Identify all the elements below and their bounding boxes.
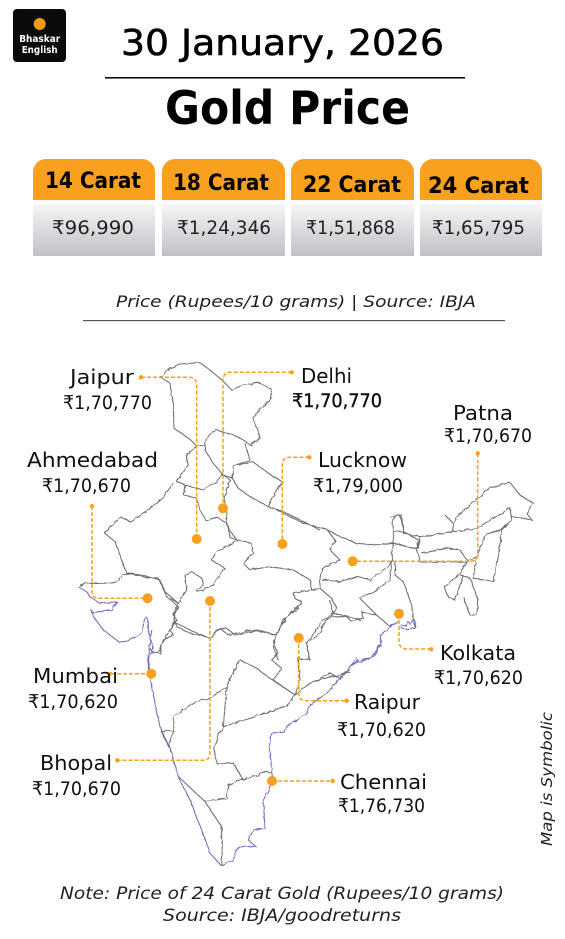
footnote bbox=[60, 884, 504, 926]
card: 14 Carat bbox=[33, 159, 155, 256]
callout: Raipur: ₹1,70,620 bbox=[337, 719, 426, 741]
callout: Ahmedabad: ₹1,70,670 bbox=[42, 475, 131, 497]
footnote: Note: Price of 24 Carat Gold (Rupees/10 grams) bbox=[60, 884, 504, 904]
logo: Bhaskar English bbox=[13, 9, 66, 62]
callout: Bhopal: ₹1,70,670 bbox=[32, 778, 121, 800]
card: 24 Carat: ₹1,65,795 bbox=[432, 217, 525, 239]
logo: Bhaskar English: English bbox=[22, 45, 58, 56]
callout: Ahmedabad bbox=[27, 448, 158, 603]
callout: Bhopal bbox=[32, 596, 215, 800]
card: 22 Carat: 22 Carat bbox=[303, 173, 401, 198]
source caption: Price (Rupees/10 grams) | Source: IBJA bbox=[116, 292, 476, 311]
map of India bbox=[78, 363, 533, 866]
footnote: Source: IBJA/goodreturns bbox=[163, 906, 401, 926]
panel: carat prices bbox=[33, 159, 542, 256]
callout: Mumbai bbox=[28, 664, 156, 713]
card: 24 Carat: 24 Carat bbox=[428, 174, 529, 199]
callout: Delhi: Delhi bbox=[301, 364, 352, 388]
callout: Chennai: ₹1,76,730 bbox=[338, 795, 425, 817]
callout: Raipur bbox=[294, 633, 426, 741]
callout: Jaipur: Jaipur bbox=[68, 365, 135, 389]
callout: Jaipur bbox=[63, 365, 202, 544]
callout: Lucknow: ₹1,79,000 bbox=[313, 475, 403, 497]
callout: Patna: Patna bbox=[453, 401, 513, 425]
callout: Delhi bbox=[218, 364, 382, 513]
callout: Patna bbox=[348, 401, 532, 566]
callout: Lucknow bbox=[277, 448, 407, 549]
date heading: 30 January, 2026 bbox=[121, 23, 444, 64]
callout: Mumbai: ₹1,70,620 bbox=[28, 691, 118, 713]
callout: Chennai: Chennai bbox=[340, 770, 427, 794]
callout: Jaipur: ₹1,70,770 bbox=[63, 392, 152, 414]
callout: Lucknow: Lucknow bbox=[318, 448, 407, 472]
callout: Patna: ₹1,70,670 bbox=[444, 425, 532, 447]
card: 14 Carat: ₹96,990 bbox=[52, 217, 134, 239]
logo: Bhaskar English: Bhaskar bbox=[19, 34, 60, 45]
map disclaimer: Map is Symbolic bbox=[538, 711, 556, 846]
card: 14 Carat: 14 Carat bbox=[45, 169, 141, 194]
callout: Kolkata bbox=[394, 609, 523, 689]
card: 22 Carat bbox=[291, 159, 414, 256]
card: 18 Carat bbox=[162, 159, 285, 256]
callout: Delhi: ₹1,70,770 bbox=[292, 390, 382, 412]
callout: Raipur: Raipur bbox=[354, 690, 421, 714]
callout: Ahmedabad: Ahmedabad bbox=[27, 448, 158, 472]
card: 18 Carat: 18 Carat bbox=[173, 171, 269, 196]
callout: Chennai bbox=[267, 770, 427, 817]
card: 18 Carat: ₹1,24,346 bbox=[177, 217, 271, 239]
callout: Bhopal: Bhopal bbox=[40, 751, 112, 775]
card: 24 Carat bbox=[420, 159, 542, 256]
callout: Kolkata: ₹1,70,620 bbox=[434, 667, 523, 689]
callout: Mumbai: Mumbai bbox=[33, 664, 118, 688]
callout: Kolkata: Kolkata bbox=[440, 641, 516, 665]
title: Gold Price bbox=[165, 81, 410, 135]
card: 22 Carat: ₹1,51,868 bbox=[306, 217, 395, 239]
